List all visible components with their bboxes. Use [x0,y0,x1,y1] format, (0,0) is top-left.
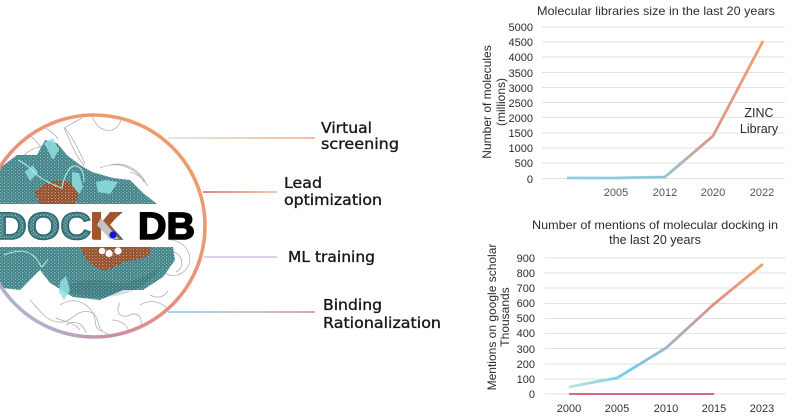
ligand white atoms [99,247,122,257]
x-axis ticks: 2010 [654,403,678,415]
y-axis ticks: 700 [517,283,535,295]
chart: molecular docking mentions [485,218,786,415]
baseline series [569,393,714,395]
y-axis ticks: 4500 [509,37,533,49]
series label: ZINC [744,106,774,120]
x-axis ticks [557,403,774,415]
gradient ring [0,115,205,337]
chart: molecular libraries size [480,4,785,199]
connector: lead optimization [203,191,277,193]
label: Lead optimization: Lead [284,174,322,192]
y-axis ticks: 2000 [509,113,533,125]
data line ZINC [567,41,763,178]
series label: Library [740,122,779,136]
y-axis ticks: 100 [517,374,535,386]
y-axis ticks: 0 [529,389,535,401]
y-axis ticks: 900 [517,253,535,265]
label: Lead optimization [284,174,382,209]
y-axis ticks: 200 [517,359,535,371]
x-axis ticks: 2023 [750,403,774,415]
protein disc with DOCK DB logo [0,114,205,337]
teal mesh surface lower [0,247,175,300]
connector: ML training [204,256,277,258]
ligand blue atom [109,231,117,239]
label: Binding Rationalization [323,296,441,332]
y-axis ticks: 0 [527,174,533,186]
teal mesh surface upper [0,140,157,204]
label: Virtual screening: Virtual [321,119,372,137]
x-axis ticks: 2022 [750,187,774,199]
chart title: Molecular libraries size in the last 20 years [537,4,775,18]
orange binding pocket lower [80,247,150,270]
label: Binding Rationalization: Binding [323,296,382,314]
chart title: the last 20 years [609,233,701,247]
y-axis ticks: 1000 [509,143,533,155]
y-axis ticks: 5000 [509,22,533,34]
logo text DB: DB [138,206,195,248]
y-axis ticks: 600 [517,298,535,310]
chart title: Number of mentions of molecular docking in [532,218,778,232]
y-axis ticks: 300 [517,344,535,356]
y-axis ticks [509,22,533,186]
label: Binding Rationalization: Rationalization [323,314,441,332]
dark mesh shading [68,266,162,297]
label: ML training: ML training [288,248,375,266]
protein illustration [0,114,190,334]
x-axis ticks: 2012 [653,187,677,199]
orange binding pocket upper [35,181,78,204]
y-axis ticks: 1500 [509,128,533,140]
chart title [532,218,778,247]
x-axis ticks: 2015 [702,403,726,415]
y-axis title: Mentions on google scholar [485,244,499,390]
cyan helices [25,138,118,300]
label: Lead optimization: optimization [284,191,382,209]
connector: binding rationalization [168,311,315,313]
label: Virtual screening: screening [321,135,399,153]
y-axis ticks: 500 [517,313,535,325]
label: Virtual screening [321,119,399,153]
y-axis unit: Thousands [498,287,512,347]
y-axis title: Number of molecules [480,45,494,159]
y-axis ticks [517,253,535,401]
y-axis ticks: 500 [515,158,533,170]
x-axis ticks: 2005 [604,187,628,199]
y-axis ticks: 800 [517,268,535,280]
y-axis ticks: 4000 [509,52,533,64]
x-axis ticks: 2020 [701,187,725,199]
x-axis ticks [604,187,774,199]
x-axis ticks: 2000 [557,403,581,415]
logo white band [0,204,158,247]
y-axis ticks: 2500 [509,98,533,110]
y-axis ticks: 3500 [509,68,533,80]
y-axis ticks: 3000 [509,83,533,95]
connector: virtual screening [168,137,315,139]
x-axis ticks: 2005 [605,403,629,415]
orange and grey detail on K [92,212,121,239]
data line mentions [569,264,763,387]
y-axis ticks: 400 [517,328,535,340]
y-axis unit: (millions) [494,78,508,126]
